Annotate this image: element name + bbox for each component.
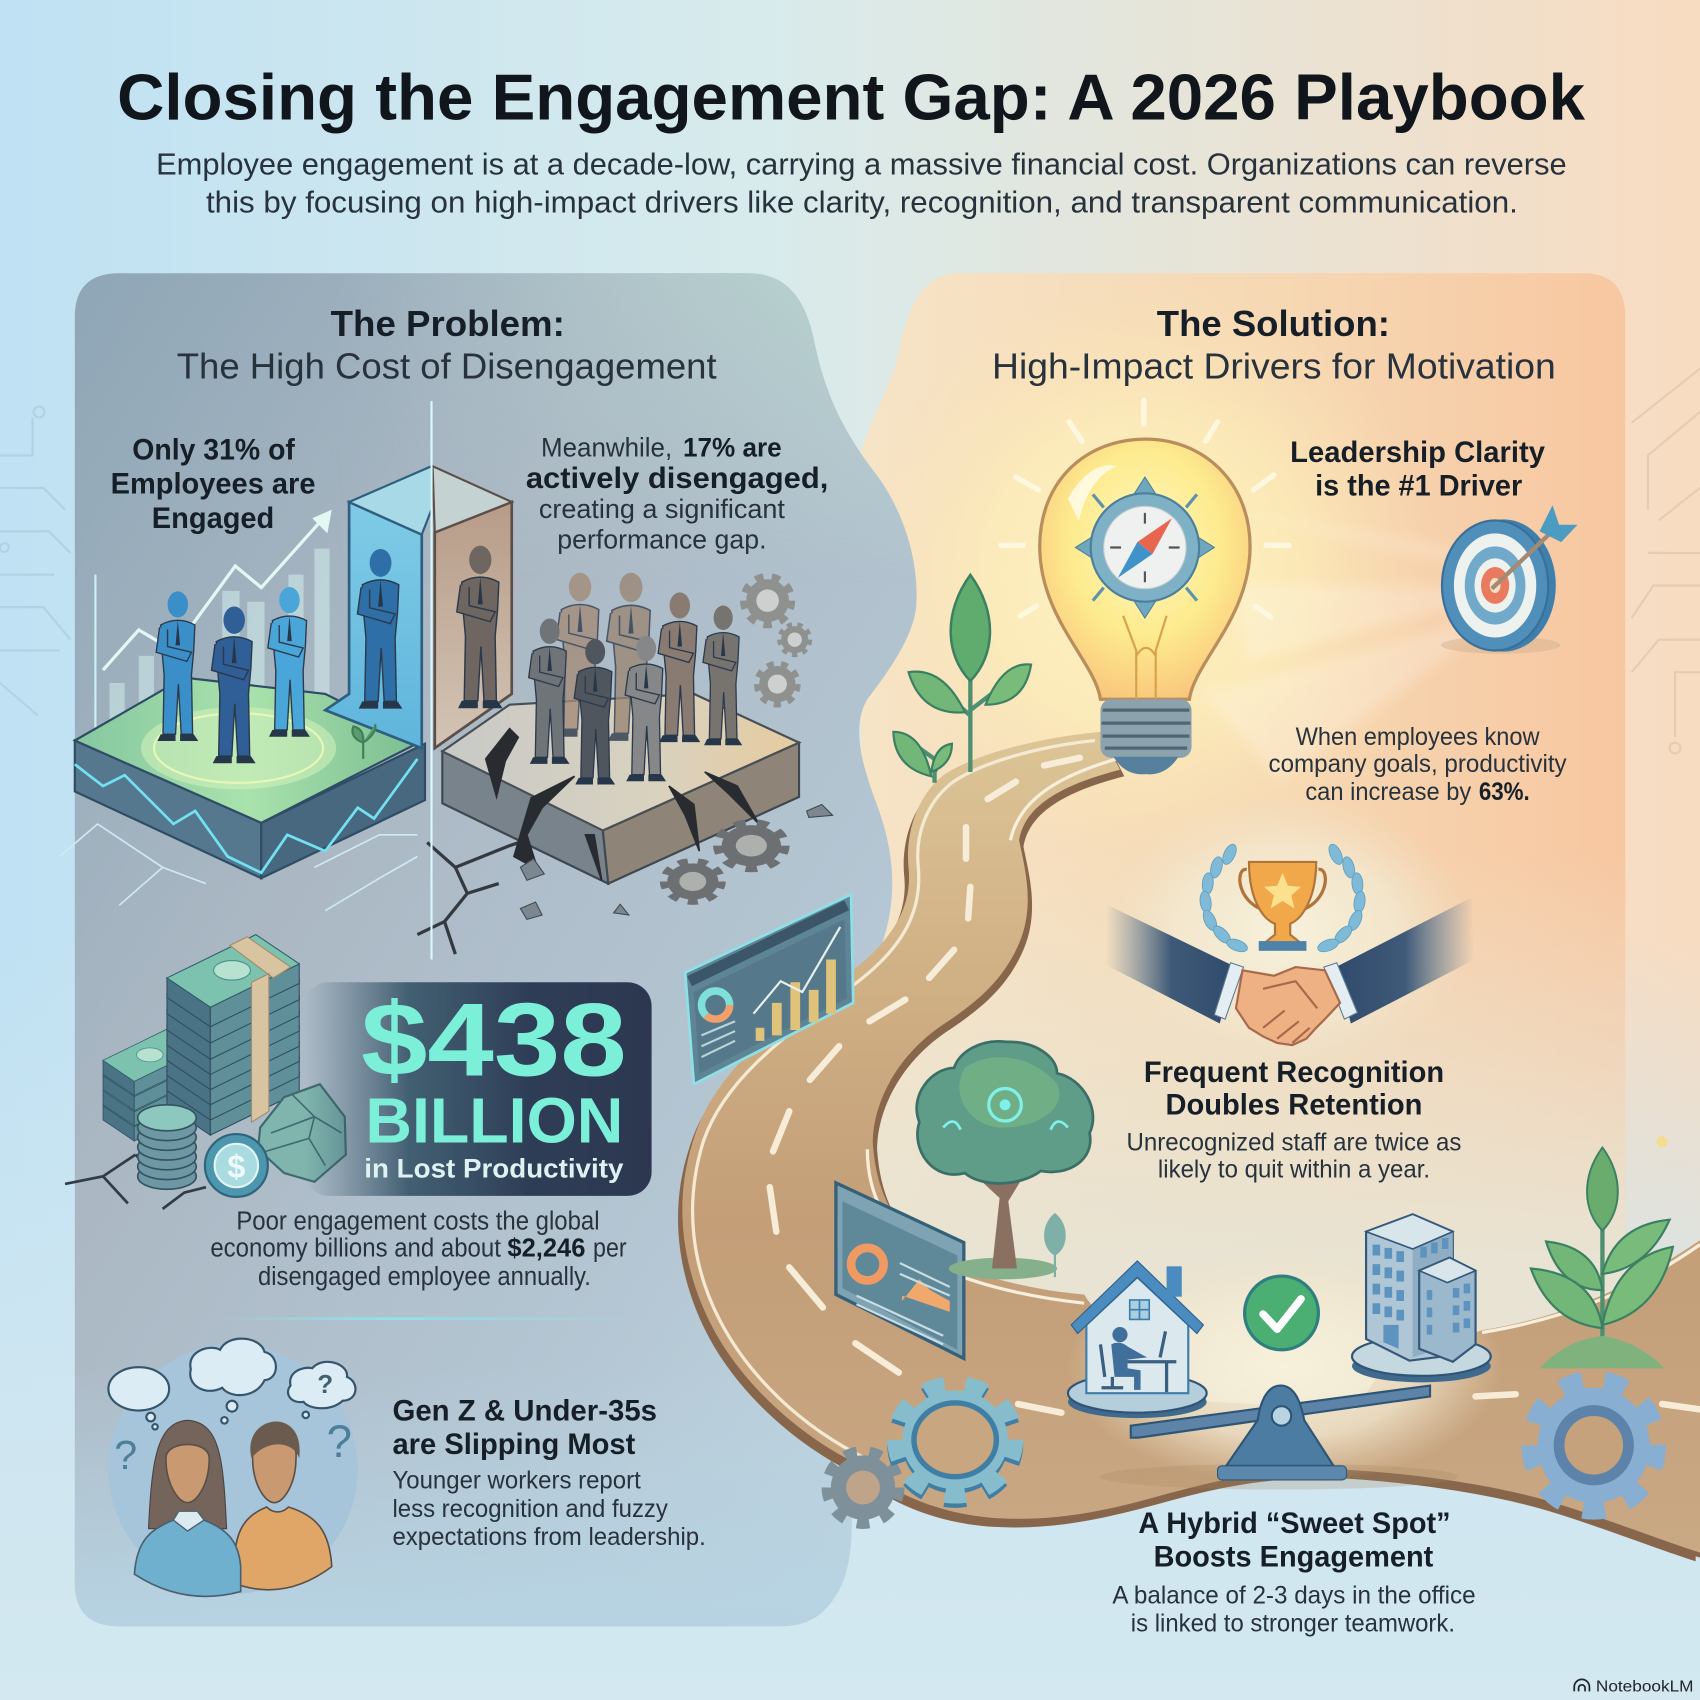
title: Closing the Engagement Gap: A 2026 Playbook xyxy=(117,60,1586,133)
icon: blue gears xyxy=(828,1386,1012,1522)
text: recognition: Unrecognized staff are twice as xyxy=(1126,1128,1461,1156)
floor crack xyxy=(417,835,542,954)
text: Gen Z: less recognition and fuzzy xyxy=(392,1495,668,1523)
divider glow xyxy=(428,401,436,960)
dashboard: upper xyxy=(685,894,853,1084)
subtitle: this by focusing on high-impact drivers like clarity, recognition, and transparent communication. xyxy=(206,186,1518,219)
cup xyxy=(1240,869,1325,909)
illustration: lightbulb xyxy=(1001,400,1289,774)
illustration: young workers: ? xyxy=(317,1369,333,1399)
left stack xyxy=(103,1029,198,1141)
stat box: $438 billion: in Lost Productivity xyxy=(364,1152,623,1183)
text: recognition: likely to quit within a year. xyxy=(1158,1155,1430,1183)
road dashes xyxy=(770,758,1700,1413)
callout: engaged: Employees are xyxy=(111,468,315,500)
glass: blue xyxy=(325,502,422,748)
illustration: young workers xyxy=(108,1339,358,1596)
laurels xyxy=(1199,842,1366,954)
illustration: young workers: ? xyxy=(114,1432,137,1478)
text: cost description: per xyxy=(593,1235,627,1263)
platform top xyxy=(75,678,421,823)
text: cost description: disengaged employee annually. xyxy=(258,1263,591,1291)
callout: engaged: Only 31% of xyxy=(132,435,295,467)
platform top xyxy=(442,694,799,830)
illustration: money stack xyxy=(65,935,346,1209)
stat box: $438 billion xyxy=(305,982,652,1196)
team figures xyxy=(156,549,402,763)
text: recognition: Doubles Retention xyxy=(1165,1090,1422,1122)
icon: right gear xyxy=(1533,1383,1654,1507)
text: hybrid: Boosts Engagement xyxy=(1154,1542,1434,1574)
text: hybrid: A Hybrid “Sweet Spot” xyxy=(1138,1508,1451,1540)
illustration: disengaged platform xyxy=(417,466,833,954)
beam xyxy=(1131,1386,1430,1438)
text: Gen Z: Younger workers report xyxy=(392,1467,641,1495)
text: recognition: Frequent Recognition xyxy=(1144,1057,1444,1089)
icon: check xyxy=(1245,1276,1318,1350)
subtitle: Employee engagement is at a decade-low, carrying a massive financial cost. Organizations can reverse xyxy=(156,149,1567,182)
illustration: money stack: $ xyxy=(227,1148,245,1184)
icon: target xyxy=(1441,505,1577,654)
glass xyxy=(1040,439,1250,699)
callout: disengaged xyxy=(526,431,828,555)
callout: disengaged: actively disengaged, xyxy=(526,463,828,495)
icon: tree xyxy=(917,1041,1093,1279)
main stack xyxy=(167,935,299,1135)
icon: handshake xyxy=(1106,898,1474,1045)
cracks xyxy=(486,729,759,880)
solution heading: The Solution: xyxy=(1157,304,1390,344)
right plate xyxy=(1352,1350,1491,1382)
solution heading: High-Impact Drivers for Motivation xyxy=(992,346,1556,386)
compass xyxy=(1076,477,1214,618)
callout: disengaged: Meanwhile, xyxy=(541,431,672,462)
thought clouds xyxy=(108,1339,355,1429)
text: cost description xyxy=(210,1207,627,1291)
callout: disengaged: performance gap. xyxy=(557,524,767,555)
filament xyxy=(1123,616,1167,699)
road edge lines xyxy=(693,740,1095,1459)
stat box: $438 billion: $438 xyxy=(361,983,627,1099)
broken pile xyxy=(258,1084,346,1182)
left plate xyxy=(1068,1386,1207,1418)
icon: home office xyxy=(1071,1261,1203,1393)
gears xyxy=(665,578,809,901)
front row figures xyxy=(457,546,742,785)
woman xyxy=(134,1420,241,1596)
text: productivity xyxy=(1268,723,1567,806)
illustration: engaged platform xyxy=(60,466,432,911)
rubble xyxy=(520,804,833,919)
scale glow xyxy=(1068,1247,1502,1485)
coin stack xyxy=(138,1105,196,1189)
platform sides xyxy=(75,740,261,878)
text: Gen Z: expectations from leadership. xyxy=(392,1523,706,1551)
text: leadership clarity xyxy=(1290,437,1546,502)
icon: office towers xyxy=(1366,1214,1476,1362)
big coin xyxy=(205,1134,268,1197)
problem heading: The Problem: xyxy=(331,304,565,344)
text: productivity: can increase by xyxy=(1305,778,1472,806)
logo: NotebookLM: NotebookLM xyxy=(1596,1678,1693,1695)
illustration: young workers: ? xyxy=(327,1416,352,1467)
chart behind team xyxy=(95,510,332,732)
text: Gen Z: are Slipping Most xyxy=(392,1429,636,1461)
text: hybrid: A balance of 2-3 days in the office xyxy=(1112,1582,1476,1610)
text: hybrid xyxy=(1112,1508,1476,1638)
callout: engaged: Engaged xyxy=(152,503,274,535)
problem heading xyxy=(177,304,717,386)
icon: plant xyxy=(1531,1136,1673,1368)
callout: engaged xyxy=(111,435,315,535)
text: cost description: Poor engagement costs the global xyxy=(236,1207,600,1235)
solution heading xyxy=(992,304,1556,386)
dashboard: lower xyxy=(836,1183,964,1358)
text: hybrid: is linked to stronger teamwork. xyxy=(1131,1610,1455,1638)
circuit decoration left xyxy=(0,407,70,716)
text: Gen Z: Gen Z & Under-35s xyxy=(392,1395,657,1427)
platform sides xyxy=(442,751,608,884)
glass: brown xyxy=(435,502,512,748)
panel: problem background xyxy=(75,273,917,1626)
text: leadership clarity: is the #1 Driver xyxy=(1315,470,1522,502)
icon: trophy xyxy=(1199,842,1366,954)
base xyxy=(1226,1386,1334,1466)
text: productivity: company goals, productivity xyxy=(1268,750,1567,778)
text: productivity: When employees know xyxy=(1296,723,1540,751)
screw base xyxy=(1100,699,1192,774)
text: productivity: 63%. xyxy=(1479,778,1530,806)
illustration: hybrid scale xyxy=(1068,1214,1491,1490)
circuit decoration right xyxy=(1632,369,1700,754)
text: cost description: $2,246 xyxy=(507,1235,585,1263)
floor cracks glow xyxy=(60,824,417,911)
callout: disengaged: 17% are xyxy=(683,431,782,462)
problem heading: The High Cost of Disengagement xyxy=(177,346,717,386)
text: cost description: economy billions and about xyxy=(210,1235,501,1263)
subtitle xyxy=(156,149,1567,220)
text: Gen Z xyxy=(392,1395,706,1551)
stat box: $438 billion: BILLION xyxy=(365,1085,623,1157)
illustration: sprout xyxy=(893,575,1031,783)
text: recognition xyxy=(1126,1057,1461,1183)
man xyxy=(233,1422,332,1590)
panel: solution background xyxy=(852,273,1625,1431)
text: leadership clarity: Leadership Clarity xyxy=(1290,437,1546,469)
back row figures xyxy=(556,573,654,741)
rays xyxy=(1001,400,1289,617)
road xyxy=(678,732,1700,1561)
sprout xyxy=(352,724,375,759)
callout: disengaged: creating a significant xyxy=(539,493,785,524)
